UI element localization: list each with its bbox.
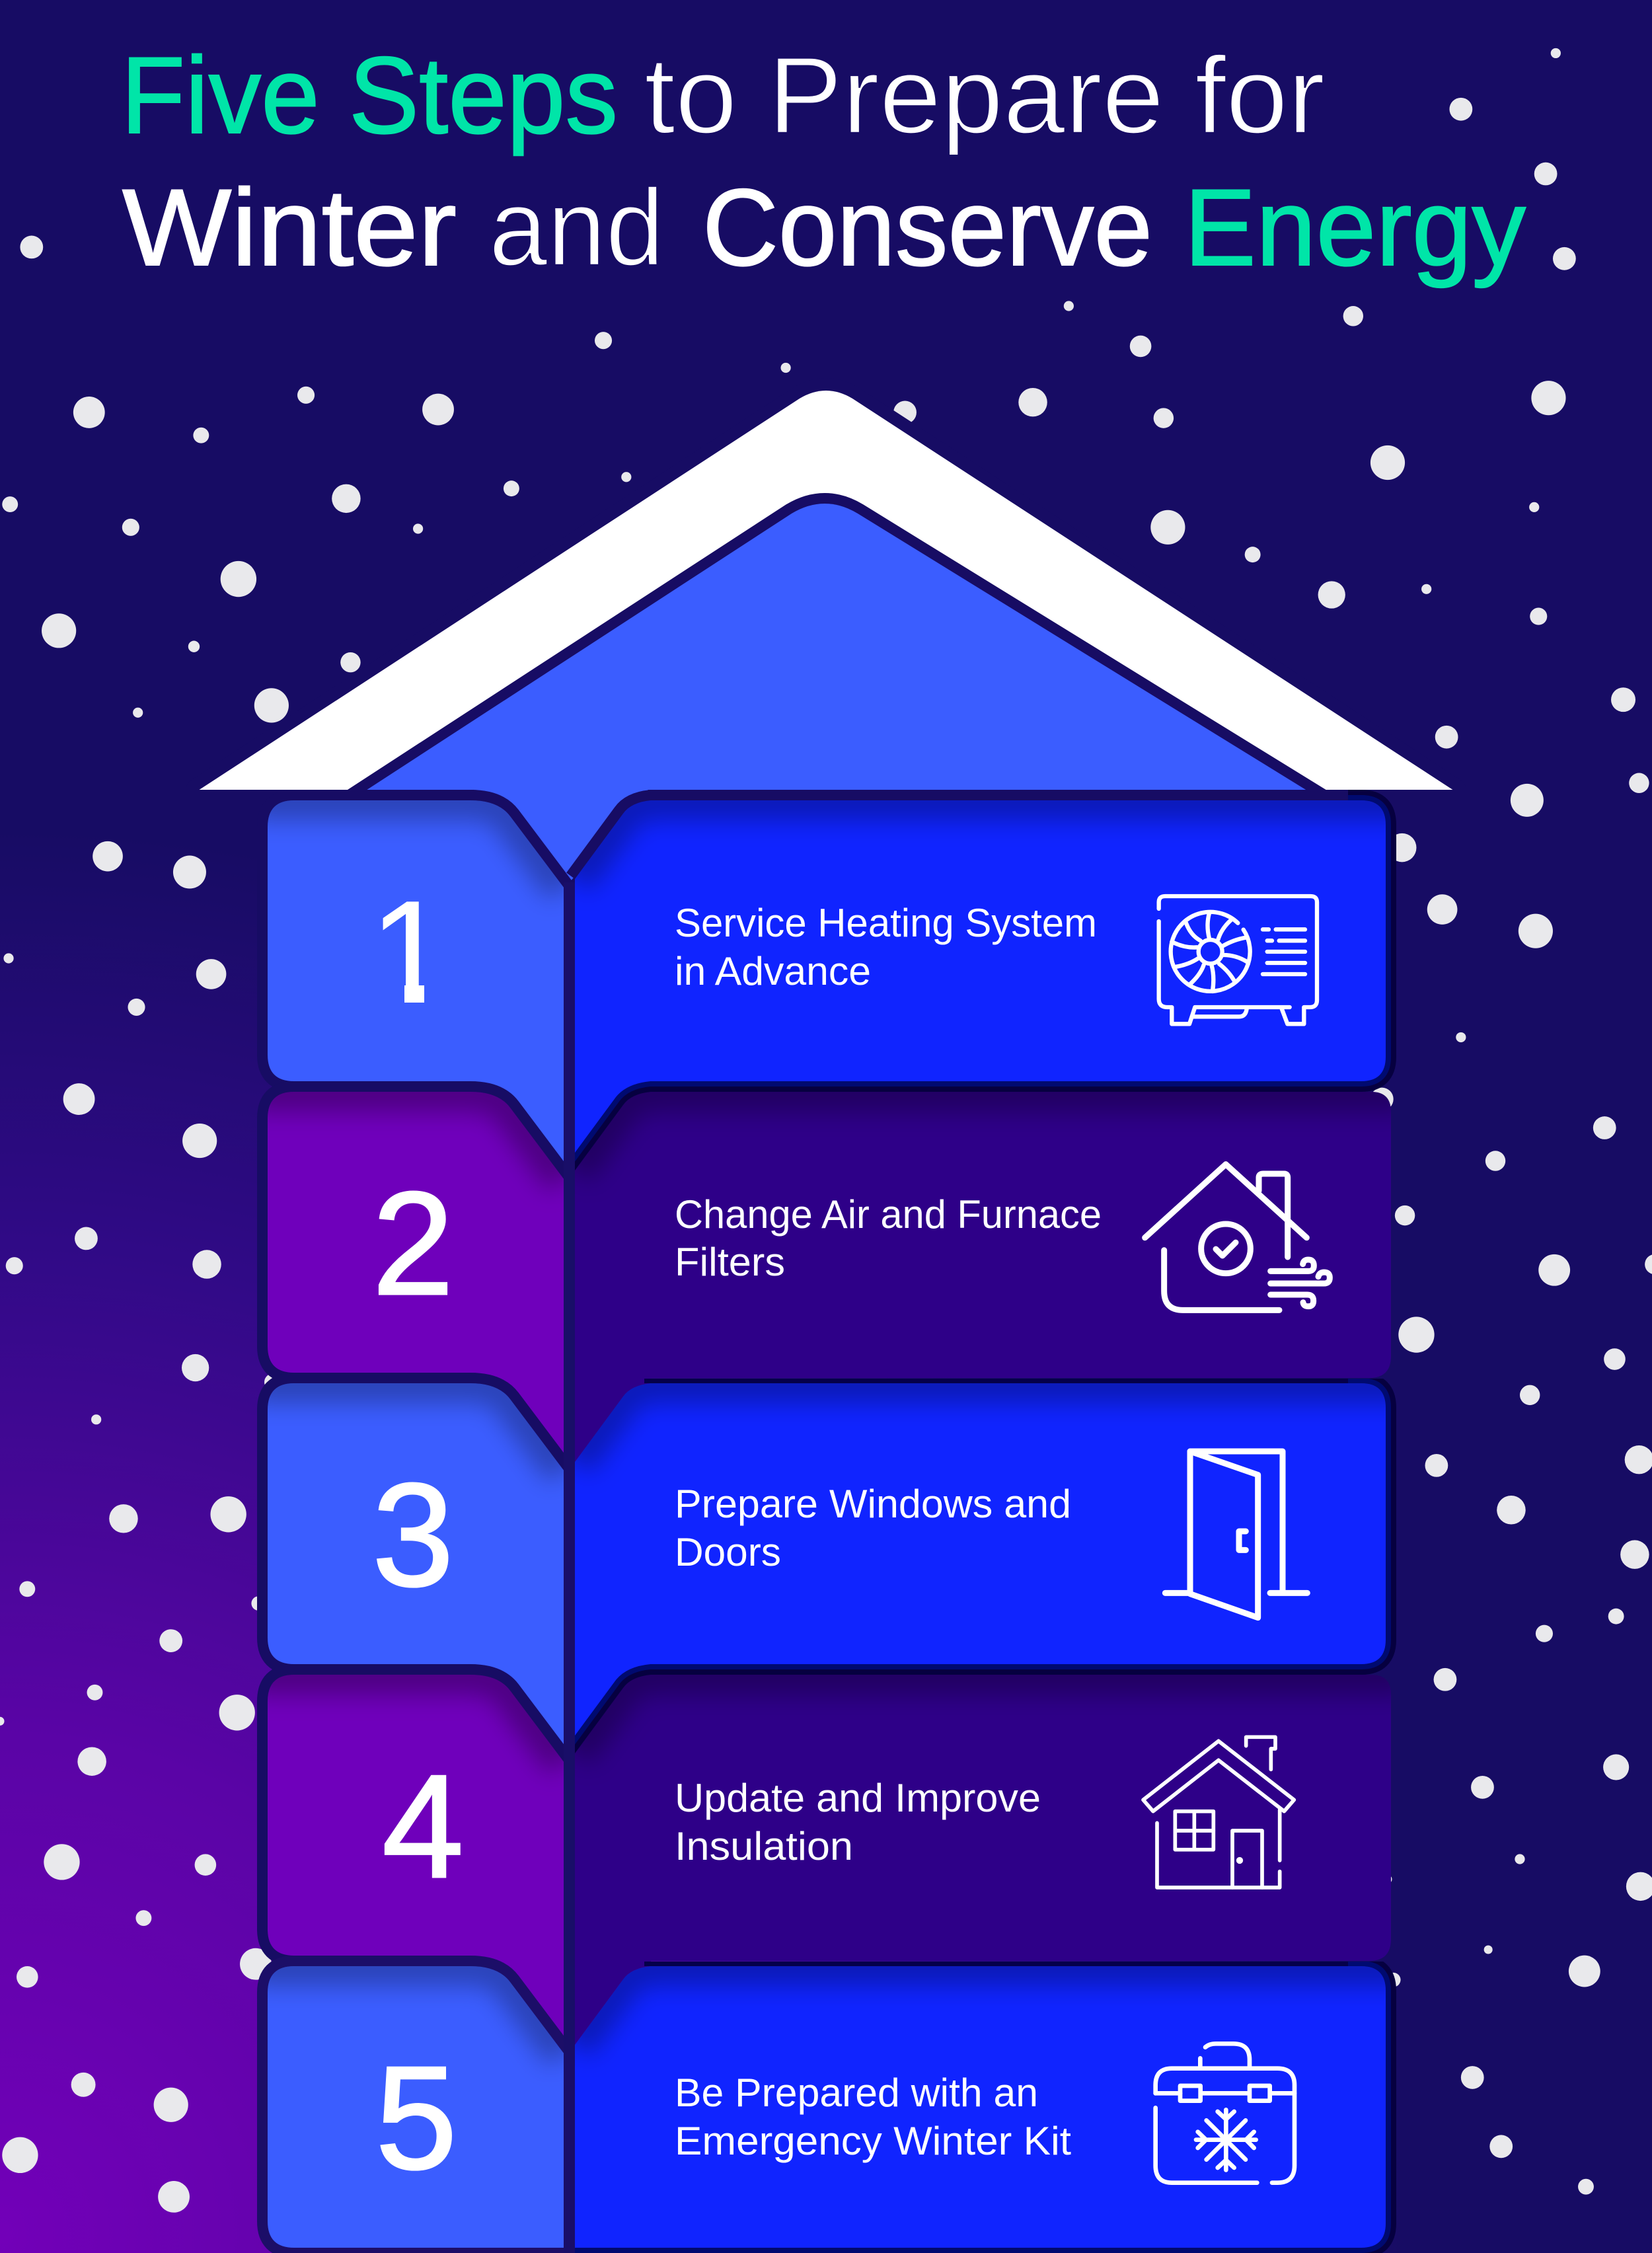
title: Energy xyxy=(1184,167,1526,288)
title: to Prepare for xyxy=(644,34,1325,156)
panel: step 2: 2 xyxy=(372,1162,454,1326)
panel: step 5: Be Prepared with an xyxy=(675,2071,1038,2115)
roof point between tabs xyxy=(470,786,651,882)
panel: step 3: Doors xyxy=(675,1530,781,1574)
panel: step 3: 3 xyxy=(372,1453,454,1617)
panel: step 3: Prepare Windows and xyxy=(675,1482,1071,1526)
icon: house with insulated roof xyxy=(1143,1737,1294,1888)
panel: step 1: in Advance xyxy=(675,949,871,993)
panel: step 2: Filters xyxy=(675,1240,785,1284)
center divider line xyxy=(564,882,575,2253)
title: Five Steps xyxy=(121,34,618,156)
panel: step 2 xyxy=(251,1092,1408,1471)
title xyxy=(121,34,1526,288)
panel: step 4 xyxy=(251,1675,1408,2054)
title: and xyxy=(489,167,664,288)
panel: step 2: Change Air and Furnace xyxy=(675,1192,1102,1237)
title: Conserve xyxy=(702,167,1152,288)
panel: step 1 xyxy=(251,800,1408,1180)
icon: heat pump unit xyxy=(1159,896,1317,1024)
panel: step 1: Service Heating System xyxy=(675,901,1097,945)
icon: open door xyxy=(1165,1451,1307,1618)
panel: step 5: Emergency Winter Kit xyxy=(675,2119,1071,2163)
panel: step 5: 5 xyxy=(375,2036,457,2200)
panel: step 4: Insulation xyxy=(675,1824,853,1868)
icon: house with air filter xyxy=(1145,1165,1330,1310)
title: Winter xyxy=(122,167,457,288)
panel: step 4: 4 xyxy=(382,1745,464,1909)
panel: step 1: 1 xyxy=(369,870,451,1034)
icon: emergency kit with snowflake xyxy=(1156,2043,1295,2183)
panel: step 3 xyxy=(251,1381,1408,1763)
panel: step 5 xyxy=(251,1964,1408,2248)
panel: step 4: Update and Improve xyxy=(675,1776,1041,1820)
house roof xyxy=(200,391,1452,790)
